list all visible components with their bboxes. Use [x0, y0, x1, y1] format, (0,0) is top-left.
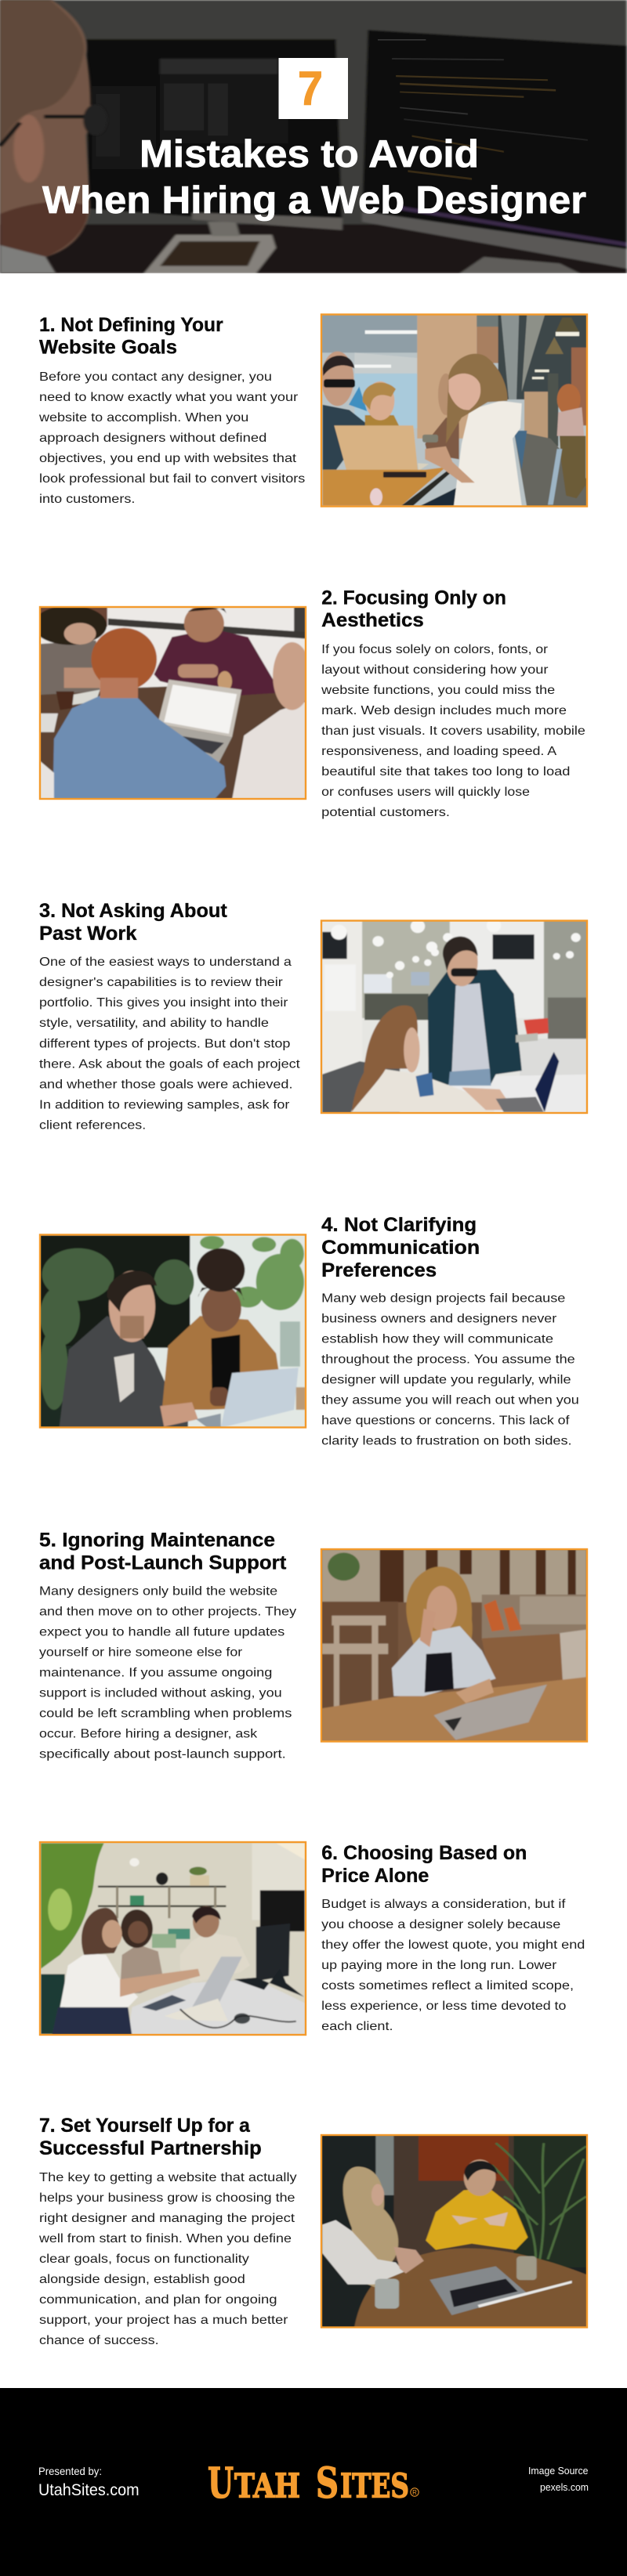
body text 5 [39, 1585, 296, 1761]
heading 4: Communication [321, 1237, 480, 1259]
hand [160, 1402, 198, 1427]
body text 3: and whether those goals were achieved. [39, 1078, 293, 1092]
heading 5: 5. Ignoring Maintenance [39, 1529, 275, 1551]
body text 2: beautiful site that takes too long to load [321, 765, 571, 779]
body text 7 [38, 2171, 297, 2347]
body text 3: different types of projects. But don't stop [39, 1037, 291, 1051]
body text 7: communication, and plan for ongoing [39, 2293, 277, 2307]
man [180, 1932, 250, 1983]
photo 3: man leaning over woman's laptop [321, 919, 588, 1114]
man [60, 1316, 188, 1429]
body text 6: you choose a designer solely because [321, 1918, 560, 1931]
heading 6 [321, 1842, 527, 1887]
heading 6: 6. Choosing Based on [321, 1842, 527, 1864]
body text 3: In addition to reviewing samples, ask for [39, 1098, 290, 1112]
laptop [192, 1956, 242, 2009]
body text 4: have questions or concerns. This lack of [321, 1414, 570, 1427]
body text 2: mark. Web design includes much more [321, 704, 567, 717]
section 5 [39, 1529, 588, 1761]
body text 2 [321, 643, 585, 819]
heading 5: and Post-Launch Support [39, 1552, 287, 1574]
heading 2: Aesthetics [321, 609, 424, 631]
section 1 [38, 313, 588, 508]
body text 5: support is included without asking, you [39, 1687, 282, 1700]
table [323, 467, 446, 506]
section 6 [39, 1841, 585, 2036]
man [426, 2188, 527, 2250]
woman [343, 2166, 398, 2288]
body text 4: establish how they will communicate [321, 1333, 553, 1346]
section 4 [39, 1214, 579, 1447]
heading 4: 4. Not Clarifying [321, 1214, 477, 1236]
man [428, 970, 522, 1092]
heading 2: 2. Focusing Only on [321, 587, 506, 609]
middle woman [120, 1945, 164, 1993]
body text 5: expect you to handle all future updates [39, 1626, 285, 1638]
laptop [158, 680, 241, 737]
body text 4: designer will update you regularly, while [321, 1374, 571, 1386]
body text 7: clear goals, focus on functionality [39, 2253, 249, 2266]
front woman [60, 1953, 138, 2007]
title [42, 133, 586, 222]
woman [351, 1069, 496, 1112]
presented by: Presented by: [38, 2465, 102, 2477]
plant [41, 1843, 104, 1969]
body text 5: could be left scrambling when problems [39, 1707, 292, 1720]
body text 7: support, your project has a much better [39, 2314, 288, 2327]
body text 2: If you focus solely on colors, fonts, or [321, 643, 549, 656]
body text 5: maintenance. If you assume ongoing [39, 1667, 272, 1679]
logo: Utah Sites: R [412, 2489, 417, 2496]
image source [528, 2465, 589, 2493]
hero background photo: developer at two monitors [0, 0, 627, 365]
body text 4: business owners and designers never [321, 1313, 557, 1325]
body text 5: Many designers only build the website [39, 1585, 277, 1598]
body text 1: objectives, you end up with websites that [39, 452, 297, 465]
laptop [221, 1367, 299, 1428]
body text 3: portfolio. This gives you insight into their [39, 996, 288, 1010]
body text 5: occur. Before hiring a designer, ask [39, 1728, 258, 1740]
body text 7: well from start to finish. When you define [38, 2232, 292, 2245]
woman [406, 1566, 473, 1657]
body text 1: look professional but fail to convert visitors [39, 472, 305, 486]
body text 1: approach designers without defined [39, 432, 266, 445]
presented by: UtahSites.com [38, 2481, 140, 2499]
table [424, 1075, 588, 1114]
body text 2: or confuses users will quickly lose [321, 786, 530, 799]
body text 2: than just visuals. It covers usability, mobile [321, 724, 585, 738]
heading 5 [39, 1529, 287, 1574]
body text 7: helps your business grow is choosing the [39, 2191, 295, 2205]
heading 6: Price Alone [321, 1865, 429, 1887]
photo 2: meeting with laptop on wooden table [33, 605, 311, 800]
laptop [433, 1685, 547, 1740]
woman behind [438, 374, 454, 415]
body text 1: into customers. [39, 493, 135, 506]
logo: Utah Sites: TAH [234, 2467, 300, 2505]
body text 7: chance of success. [39, 2334, 159, 2347]
body text 4: they assume you will reach out when you [321, 1394, 579, 1407]
right man [232, 702, 306, 800]
body text 5: and then move on to other projects. They [39, 1606, 296, 1618]
heading 7: Successful Partnership [39, 2137, 262, 2159]
body text 2: website functions, you could miss the [321, 684, 555, 697]
body text 4: clarity leads to frustration on both sides. [321, 1435, 572, 1447]
body text 2: responsiveness, and loading speed. A [321, 745, 557, 758]
body text 5: specifically about post-launch support. [39, 1748, 286, 1761]
body text 3 [39, 956, 300, 1133]
body text 2: layout without considering how your [321, 663, 549, 677]
laptop [496, 1097, 544, 1112]
heading 7: 7. Set Yourself Up for a [39, 2115, 251, 2137]
body text 1: need to know exactly what you want your [39, 391, 299, 404]
hero banner [0, 0, 627, 273]
left man [323, 405, 369, 470]
body text 6 [321, 1898, 585, 2033]
body text 7: right designer and managing the project [39, 2212, 295, 2225]
monitor [256, 1924, 290, 1981]
body text 6: they offer the lowest quote, you might end [321, 1938, 585, 1952]
table [354, 2249, 588, 2328]
presented by [38, 2465, 140, 2499]
logo: Utah Sites: ITES [340, 2467, 409, 2505]
laptop [334, 425, 418, 471]
body text 6: each client. [321, 2020, 393, 2033]
heading 4 [321, 1214, 480, 1281]
body text 1: website to accomplish. When you [38, 411, 248, 425]
body text 6: costs sometimes reflect a limited scope, [321, 1979, 574, 1993]
far right woman [557, 384, 581, 415]
laptop [429, 2266, 527, 2315]
photo 7: two people talking over a round table [321, 2134, 588, 2328]
body text 7: alongside design, establish good [39, 2273, 245, 2286]
heading 3 [39, 900, 227, 945]
body text 3: style, versatility, and ability to handle [39, 1017, 269, 1030]
logo: Utah Sites: U [208, 2459, 234, 2508]
blue shirt [53, 695, 226, 800]
heading 1: 1. Not Defining Your [39, 314, 223, 336]
section 2 [33, 587, 585, 819]
number badge [279, 58, 348, 119]
body text 5: yourself or hire someone else for [39, 1646, 243, 1659]
body text 4: Many web design projects fail because [321, 1292, 566, 1305]
heading 7 [39, 2115, 262, 2159]
body text 3: there. Ask about the goals of each project [39, 1057, 300, 1071]
heading 2 [321, 587, 506, 631]
number badge: 7 [298, 62, 323, 115]
heading 4: Preferences [321, 1259, 437, 1281]
photo 6: three coworkers at a white table [39, 1841, 306, 2036]
heading 3: 3. Not Asking About [39, 900, 227, 922]
logo: Utah Sites: S [316, 2459, 339, 2508]
body text 4: throughout the process. You assume the [321, 1353, 575, 1366]
body text 6: Budget is always a consideration, but if [321, 1898, 566, 1911]
body text 6: up paying more in the long run. Lower [321, 1959, 557, 1972]
title: When Hiring a Web Designer [42, 179, 586, 222]
heading 3: Past Work [39, 923, 137, 945]
woman [162, 1316, 284, 1410]
title: Mistakes to Avoid [140, 133, 479, 175]
photo 4: two colleagues at a laptop among plants [39, 1234, 306, 1429]
image source: pexels.com [540, 2481, 589, 2493]
body text 2: potential customers. [321, 806, 450, 819]
body text 7: The key to getting a website that actually [39, 2171, 297, 2184]
body text 3: designer's capabilities is to review their [39, 976, 283, 989]
glasses [375, 2279, 399, 2309]
footer [0, 2388, 627, 2576]
logo: Utah Sites [208, 2459, 419, 2508]
heading 1 [39, 314, 223, 359]
photo 5: woman on the phone at a wooden table [321, 1548, 588, 1742]
body text 3: One of the easiest ways to understand a [39, 956, 292, 969]
boy [365, 415, 400, 428]
body text 6: less experience, or less time devoted to [321, 2000, 567, 2013]
table [128, 1979, 306, 2036]
section 3 [39, 900, 588, 1133]
heading 1: Website Goals [39, 337, 177, 359]
body text 3: client references. [39, 1118, 146, 1133]
image source: Image Source [528, 2465, 588, 2477]
body text 1: Before you contact any designer, you [39, 370, 272, 384]
body text 4 [321, 1292, 579, 1447]
body text 1 [38, 370, 305, 506]
section 7 [38, 2115, 588, 2347]
hoodie woman [454, 401, 522, 506]
photo 1: team around a laptop in a brick office [321, 313, 588, 508]
